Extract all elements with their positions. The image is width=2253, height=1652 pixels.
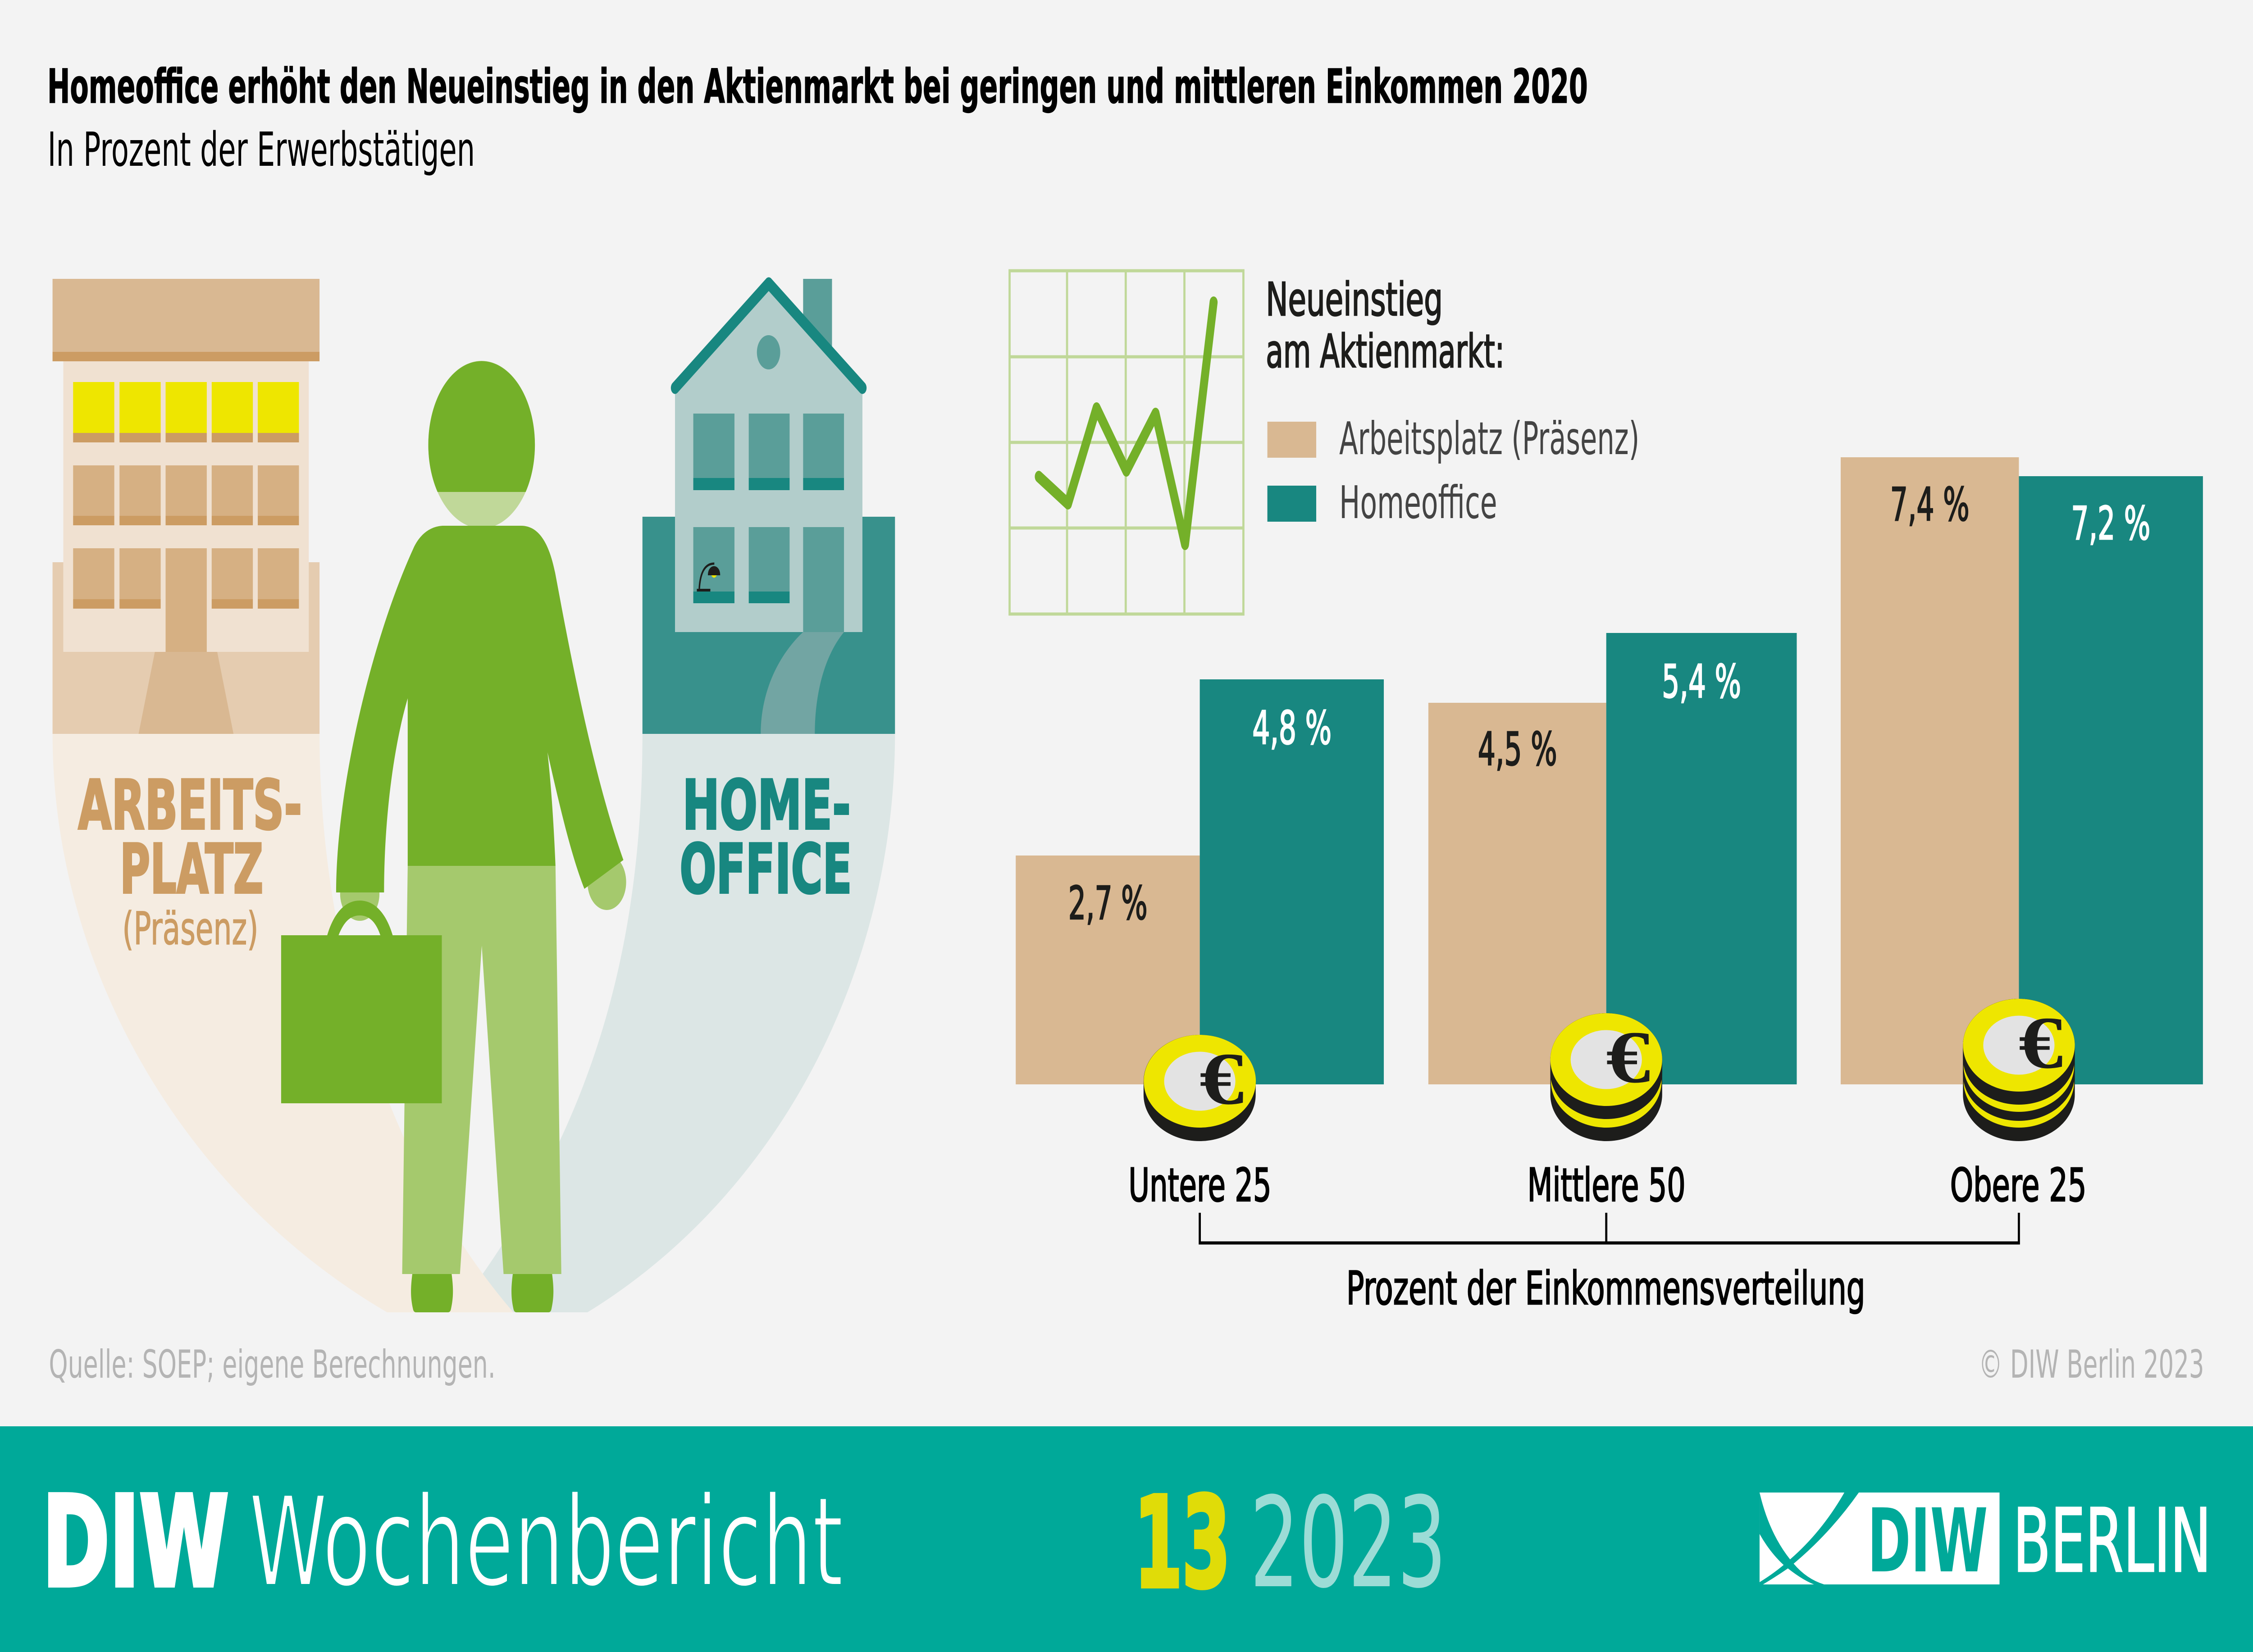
issue number: 13: [1134, 1470, 1230, 1616]
label: arbeitsplatz: (Präsenz): [122, 903, 258, 956]
icon: single coin: €: [1199, 1038, 1244, 1120]
title: Homeoffice erhöht den Neueinstieg in den Aktienmarkt bei geringen und mittleren Einkommen 2020: [47, 59, 1588, 114]
bracket: [1200, 1213, 2019, 1243]
icon: coin stack of two: [1551, 1013, 1662, 1141]
house illustration: [643, 279, 895, 734]
issue number: [1134, 1470, 1446, 1616]
person with briefcase: [281, 361, 626, 1312]
legend title: am Aktienmarkt:: [1266, 324, 1505, 378]
icon: desk lamp: [697, 564, 720, 592]
group: Mittlere 50: [1428, 633, 1797, 1084]
trousers: [402, 866, 561, 1274]
legend item: Homeoffice: [1268, 477, 1497, 529]
publication name: DIW: [42, 1470, 228, 1615]
label: homeoffice: [680, 765, 852, 909]
logo: DIW Berlin: DIW: [1867, 1490, 1988, 1593]
icon: coin stack of three: [1963, 999, 2075, 1141]
legend: [1266, 273, 1639, 529]
footer band: [0, 1426, 2253, 1652]
group: Mittlere 50: 5,4 %: [1662, 655, 1741, 709]
group: Untere 25: 2,7 %: [1068, 876, 1148, 930]
legend title: Neueinstieg: [1266, 273, 1443, 327]
group: Obere 25: 7,2 %: [2071, 496, 2150, 551]
shoes: [411, 1274, 553, 1312]
fan shape: arbeitsplatz: [53, 734, 513, 1312]
legend item: Arbeitsplatz: Arbeitsplatz (Präsenz): [1339, 413, 1639, 465]
windows: lit row: [73, 382, 299, 433]
icon: coin stack of two: €: [1606, 1016, 1651, 1098]
group: Untere 25: 4,8 %: [1252, 701, 1332, 755]
torso and arms: [336, 526, 623, 892]
fan shape: homeoffice: [455, 734, 895, 1312]
group: Obere 25: [1841, 457, 2203, 1084]
head: [428, 361, 535, 528]
windows: dark rows: [73, 465, 299, 652]
icon: single coin: [1144, 1035, 1256, 1141]
group: Mittlere 50: 4,5 %: [1478, 722, 1557, 776]
label: arbeitsplatz: [78, 765, 302, 956]
source note: Quelle: SOEP; eigene Berechnungen.: [49, 1343, 496, 1387]
axis labels: Mittlere 50: [1527, 1158, 1686, 1212]
subtitle: In Prozent der Erwerbstätigen: [48, 122, 475, 177]
panel: homeoffice fan: [455, 279, 895, 1312]
publication name: Wochenbericht: [249, 1470, 844, 1615]
copyright: © DIW Berlin 2023: [1979, 1343, 2204, 1387]
hands: [340, 854, 626, 921]
issue number: 2023: [1250, 1470, 1446, 1616]
group: Untere 25: [1016, 679, 1384, 1084]
icon: stock chart: [1010, 271, 1243, 614]
axis labels: Untere 25: [1128, 1158, 1271, 1212]
axis labels: [1128, 1158, 2086, 1212]
legend item: Homeoffice: Homeoffice: [1339, 477, 1497, 529]
axis title: Prozent der Einkommensverteilung: [1346, 1261, 1865, 1315]
label: homeoffice: HOME-: [682, 765, 851, 845]
logo: DIW Berlin: [1760, 1490, 2211, 1593]
bar chart: [1016, 457, 2203, 1084]
label: homeoffice: OFFICE: [680, 829, 852, 909]
logo: DIW Berlin: BERLIN: [2013, 1490, 2211, 1593]
group: Obere 25: 7,4 %: [1890, 478, 1970, 532]
office building illustration: [53, 279, 319, 734]
axis labels: Obere 25: [1950, 1158, 2086, 1212]
label: arbeitsplatz: ARBEITS-: [78, 765, 302, 845]
legend title: [1266, 273, 1505, 378]
label: arbeitsplatz: PLATZ: [120, 829, 263, 909]
icon: coin stack of three: €: [2019, 1001, 2063, 1084]
window sills: [73, 433, 299, 609]
panel: arbeitsplatz fan: [53, 279, 513, 1312]
band background: [0, 1426, 2253, 1652]
briefcase: [281, 901, 442, 1103]
